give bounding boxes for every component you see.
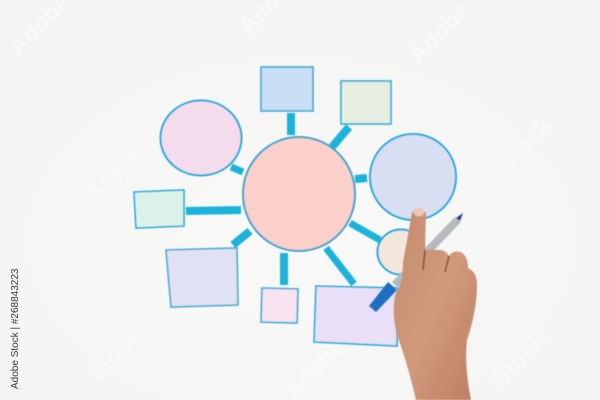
top blue square <box>261 67 313 111</box>
central circle <box>243 137 355 251</box>
fingernail <box>414 208 424 216</box>
connector: peach circle <box>350 223 380 240</box>
bottom right purple rectangle <box>314 286 398 346</box>
bottom pink square <box>261 288 298 323</box>
left green rectangle <box>134 190 184 228</box>
watermarks: Stock <box>82 322 148 387</box>
connector: right circle <box>355 178 367 179</box>
connector: bottom square <box>280 253 288 285</box>
watermarks: Stock <box>492 112 558 177</box>
watermarks: Stock <box>487 327 553 392</box>
connector: pink circle <box>231 167 243 172</box>
lower left lavender rectangle <box>166 248 238 307</box>
stock credit: Adobe Stock | #268843223 <box>10 268 21 389</box>
pink circle node <box>160 100 242 176</box>
pen <box>369 213 463 312</box>
pen barrel <box>392 217 461 288</box>
connector: top square <box>287 113 295 135</box>
connector: bottom right rectangle <box>326 248 354 284</box>
connector: upper right square <box>332 127 349 147</box>
upper right green square <box>341 81 391 124</box>
lavender circle node <box>370 134 456 220</box>
connector: left rectangle <box>186 210 241 211</box>
hand silhouette <box>394 209 477 400</box>
watermarks <box>137 138 400 346</box>
hand <box>394 208 477 400</box>
pen tip <box>456 213 463 221</box>
connector: lower left rectangle <box>233 231 250 245</box>
peach circle node <box>378 230 424 274</box>
pen cap <box>369 282 397 312</box>
mind map diagram <box>134 67 456 346</box>
finger creases <box>423 250 449 272</box>
watermarks: Stock <box>82 142 148 207</box>
